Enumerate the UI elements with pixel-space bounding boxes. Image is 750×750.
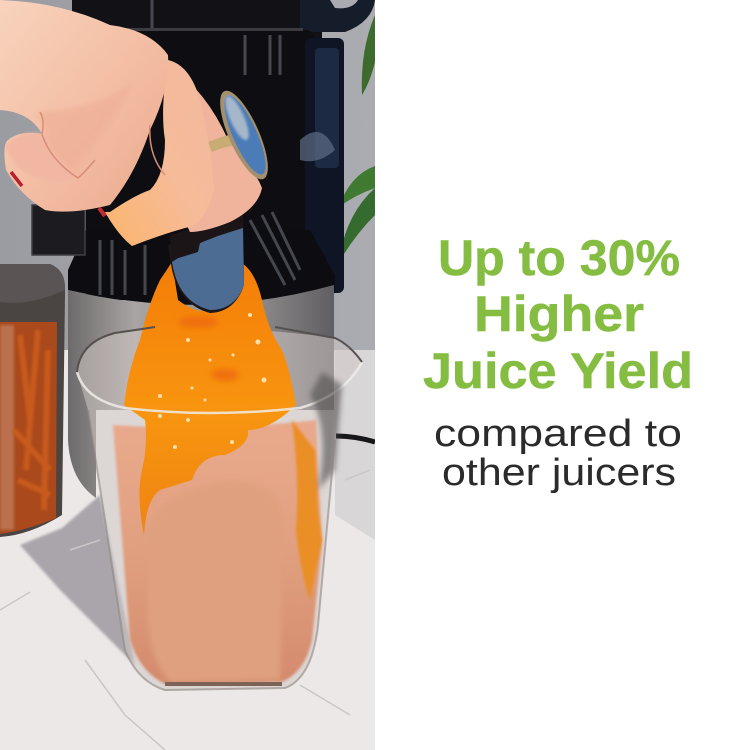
ring band: [208, 135, 232, 152]
heading: Up to 30% Higher Juice Yield: Up to 30%: [438, 230, 680, 286]
background wall: [0, 0, 375, 360]
glossy reflections: [100, 0, 335, 295]
glass jug back rim and body: [77, 329, 362, 691]
jug spout shadow: [310, 372, 342, 490]
heading: Up to 30% Higher Juice Yield: Juice Yield: [423, 343, 693, 399]
pale foam panel: [150, 596, 281, 682]
knuckle shading: [40, 97, 119, 164]
text block: headline and subheading: [423, 230, 693, 494]
stainless base: [68, 285, 334, 498]
hand: [0, 0, 262, 246]
subheading: compared to other juicers: [434, 413, 682, 494]
ring with blue stone: [220, 90, 268, 180]
marble countertop: [0, 350, 375, 750]
subheading: compared to other juicers: other juicers: [442, 452, 676, 494]
jug base line: [165, 682, 282, 686]
red nails: [11, 172, 22, 186]
darker pulp patches: [178, 316, 239, 381]
scraper handle tool: [168, 213, 244, 313]
thumb tip: [5, 132, 66, 172]
plant leaves: [344, 15, 375, 254]
subheading: compared to other juicers: compared to: [434, 413, 682, 455]
juicer body: [32, 0, 375, 305]
jug front rim highlight: [77, 362, 362, 413]
juice in the jug: [113, 420, 322, 684]
photo: juicer pouring pulp into a glass jug: [0, 0, 375, 750]
heading: Up to 30% Higher Juice Yield: Higher: [474, 286, 644, 342]
orange pulp stream: [124, 262, 296, 535]
far finger with ring: [188, 89, 262, 232]
long finger: [105, 60, 214, 246]
jug glass edges: [88, 410, 335, 690]
pulp highlights: [158, 313, 266, 449]
finger creases: [40, 112, 165, 178]
jug far rim: [77, 327, 362, 372]
palm and wrist: [0, 0, 168, 212]
heading: Up to 30% Higher Juice Yield: [423, 230, 693, 399]
carrot pulp container: [0, 264, 65, 537]
cable: [336, 436, 375, 442]
pulp at the juice edge: [292, 420, 322, 600]
